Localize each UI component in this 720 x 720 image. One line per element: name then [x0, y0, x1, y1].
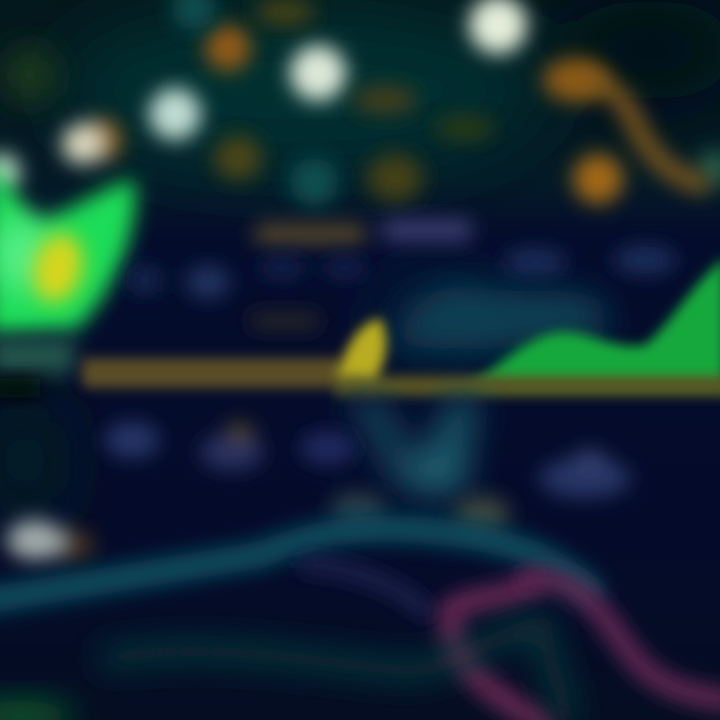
bubble: teal middle — [290, 158, 338, 206]
label accent — [226, 422, 254, 442]
curve: magenta flow right — [530, 580, 720, 700]
crown yellow core — [26, 228, 90, 308]
label — [104, 422, 160, 458]
top light bubbles — [0, 0, 720, 206]
bubble: olive top — [255, 0, 315, 26]
bubble: olive mid — [353, 86, 417, 114]
bubble: bottom left pale — [7, 520, 94, 561]
heading word gold — [255, 224, 365, 244]
corner: bottom left green — [0, 700, 75, 720]
crown shadow — [0, 378, 40, 398]
bubble: far left pale — [0, 153, 21, 191]
bubble: left pale — [149, 88, 201, 140]
curve: teal flow — [0, 529, 590, 600]
label with gold — [200, 434, 264, 470]
chart: teal funnel — [345, 395, 480, 496]
bubble: olive center — [214, 136, 262, 180]
label — [323, 258, 367, 278]
text block: lower labels — [104, 422, 631, 532]
label — [613, 246, 677, 274]
marker: yellow pin — [335, 318, 386, 380]
label — [300, 432, 356, 464]
label — [186, 266, 230, 298]
label accent right — [574, 450, 606, 470]
label — [258, 258, 306, 278]
text block: upper labels — [127, 246, 677, 328]
bubble: amber blob right — [543, 58, 607, 102]
label — [127, 266, 163, 294]
curve: magenta flow left — [450, 585, 545, 720]
bubble: top right white — [469, 0, 527, 54]
crown base — [0, 338, 75, 374]
curve: dark green flow — [100, 625, 570, 720]
label right — [539, 458, 631, 498]
label — [503, 249, 567, 275]
label bottom right — [454, 496, 510, 532]
bubble: teal right — [697, 150, 720, 186]
bubble: olive small — [435, 116, 495, 140]
crown highlight — [0, 217, 50, 293]
axis: gold bar — [82, 358, 342, 388]
bubble: orange right — [573, 154, 623, 204]
bubble: teal top — [172, 0, 216, 30]
chart: teal area behind — [395, 286, 610, 350]
background glows — [0, 0, 720, 530]
icon: green crown shape — [0, 160, 135, 398]
curve: purple flow — [300, 565, 430, 615]
bubble: olive left — [4, 47, 56, 103]
label gold small — [250, 314, 320, 328]
bubble: olive center right — [367, 154, 423, 202]
heading word purple — [382, 219, 472, 241]
curve: amber arc right — [590, 80, 700, 184]
bubble: center white — [290, 45, 346, 101]
axis: gold line right — [335, 376, 720, 396]
chart: green area — [465, 258, 720, 388]
text block: heading row — [255, 219, 472, 244]
bubble: orange top — [205, 25, 251, 71]
bubble: left amber — [62, 118, 122, 164]
label bottom — [330, 492, 386, 524]
